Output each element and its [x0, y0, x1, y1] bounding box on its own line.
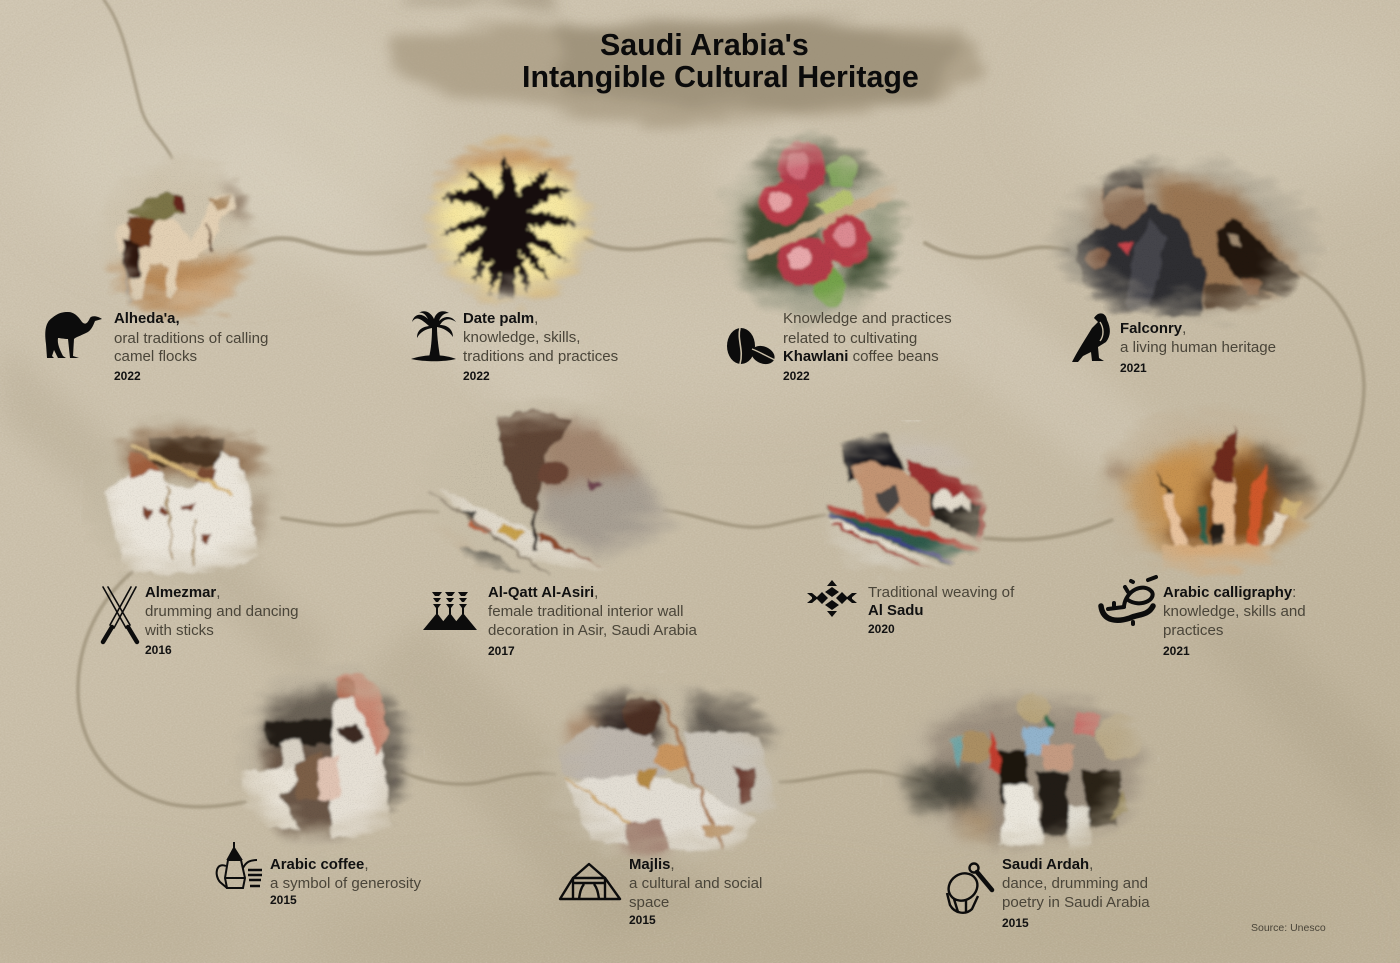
icon: date palm — [411, 311, 456, 361]
text: Arabic calligraphy: 2021 — [1163, 644, 1190, 658]
text: Alheda'a: oral traditions of calling — [114, 330, 268, 347]
text: Al-Qatt Al-Asiri: decoration in Asir, Saudi Arabia — [488, 622, 698, 639]
text: Almezmar: drumming and dancing — [145, 603, 299, 620]
panel: Al Sadu — [800, 420, 1015, 636]
connector: winding path linking the heritage items — [78, 0, 1364, 807]
text: Arabic calligraphy: Arabic calligraphy — [1163, 585, 1293, 601]
text: Khawlani coffee: related to cultivating — [783, 330, 917, 347]
text: Date palm: , — [534, 310, 538, 327]
photo: calligraphy pens in a holder — [1100, 410, 1325, 576]
icon: dallah coffee pot and cups — [217, 842, 262, 888]
text: Majlis: 2015 — [629, 913, 656, 927]
text: Khawlani coffee: coffee beans — [848, 348, 939, 365]
panel: Almezmar — [80, 410, 299, 657]
text: Al-Qatt Al-Asiri: 2017 — [488, 644, 515, 658]
text: Arabic calligraphy: practices — [1163, 622, 1223, 639]
photo: falconer with a perched falcon — [1048, 154, 1322, 325]
icon: drum and stick — [943, 864, 992, 913]
text: Date palm: traditions and practices — [463, 348, 618, 365]
text: Saudi Ardah: poetry in Saudi Arabia — [1002, 894, 1150, 911]
text: Al Sadu: Traditional weaving of — [868, 584, 1015, 601]
photo: men serving Arabic coffee — [238, 664, 415, 845]
text: Alheda'a: Alheda'a, — [114, 311, 180, 327]
icon: Al-Qatt triangles and plant motifs — [423, 592, 477, 630]
title backdrop: soft brush stroke — [388, 0, 985, 124]
text: Khawlani coffee: 2022 — [783, 369, 810, 383]
panel: Majlis — [545, 684, 784, 924]
photo: crowd performing the Ardah with drums — [880, 670, 1160, 870]
text: Falconry: 2021 — [1120, 361, 1147, 375]
text: Arabic calligraphy: knowledge, skills and — [1163, 603, 1306, 620]
text: Almezmar: Almezmar — [145, 585, 216, 601]
icon: Arabic calligraphy mark — [1101, 577, 1156, 624]
icon: crossed sticks — [103, 587, 137, 642]
text: Almezmar: 2016 — [145, 643, 172, 657]
text: Date palm: Date palm — [463, 311, 534, 327]
panel: Date palm — [411, 134, 618, 380]
icon: camel — [45, 312, 102, 358]
panel: Arabic coffee — [217, 655, 425, 907]
panel: Arabic calligraphy — [1098, 410, 1325, 655]
text: Saudi Ardah: Saudi Ardah — [1002, 857, 1089, 873]
icon: coffee beans — [727, 328, 777, 367]
text: Saudi Ardah: 2015 — [1002, 916, 1029, 930]
text: Al Sadu: Al Sadu — [868, 603, 923, 619]
title: Intangible Cultural Heritage — [522, 60, 919, 94]
text: Majlis: , — [670, 856, 675, 873]
text: Al-Qatt Al-Asiri: , — [594, 584, 598, 601]
text: Almezmar: with sticks — [144, 622, 214, 639]
text: Al-Qatt Al-Asiri: female traditional interior wall — [488, 603, 683, 620]
text: Date palm: knowledge, skills, — [463, 329, 580, 346]
text: Majlis: a cultural and social — [629, 875, 762, 892]
text: Majlis: space — [629, 894, 669, 911]
text: Khawlani coffee: Khawlani — [783, 349, 848, 365]
text: Alheda'a: 2022 — [114, 369, 141, 383]
text: Date palm: 2022 — [463, 369, 490, 383]
photo: red coffee cherries on a branch — [719, 130, 911, 330]
photo: saddled camels in the desert — [104, 156, 256, 324]
icon: Sadu diamond pattern — [807, 580, 857, 617]
text: Falconry: Falconry — [1120, 321, 1183, 337]
panel: Al-Qatt Al-Asiri — [410, 390, 700, 658]
photo: palm crown against a yellow sun — [422, 134, 594, 311]
text: Arabic coffee: Arabic coffee — [270, 857, 364, 873]
photo: woman's hand painting a decorated wall — [426, 398, 680, 576]
text: Alheda'a: camel flocks — [114, 348, 197, 365]
photo: hand weaving a red and black textile — [816, 420, 988, 570]
text: Almezmar: , — [216, 584, 220, 601]
panel: Alheda'a — [45, 156, 268, 380]
photo: men seated in a majlis — [530, 670, 800, 875]
panel: Saudi Ardah — [880, 670, 1160, 930]
text: Falconry: , — [1182, 320, 1186, 337]
source note: Source: Unesco — [1251, 922, 1326, 934]
icon: tent — [560, 864, 620, 899]
icon: falcon — [1072, 313, 1110, 362]
panel: Khawlani coffee — [719, 130, 952, 380]
text: Al-Qatt Al-Asiri: Al-Qatt Al-Asiri — [488, 585, 594, 601]
photo: men in white thobes drumming and dancing — [84, 415, 275, 576]
text: Saudi Ardah: dance, drumming and — [1002, 875, 1148, 892]
text: Falconry: a living human heritage — [1120, 339, 1276, 356]
text: Arabic coffee: 2015 — [270, 893, 297, 907]
text: Al Sadu: 2020 — [868, 622, 895, 636]
text: Saudi Ardah: , — [1089, 856, 1093, 873]
text: Majlis: Majlis — [629, 857, 670, 873]
text: Arabic calligraphy: : — [1292, 584, 1296, 601]
title: Saudi Arabia's — [600, 28, 809, 62]
text: Arabic coffee: a symbol of generosity — [270, 875, 421, 892]
text: Arabic coffee: , — [364, 856, 369, 873]
text: Khawlani coffee: Knowledge and practices — [783, 310, 952, 327]
panel: Falconry — [1048, 154, 1322, 372]
